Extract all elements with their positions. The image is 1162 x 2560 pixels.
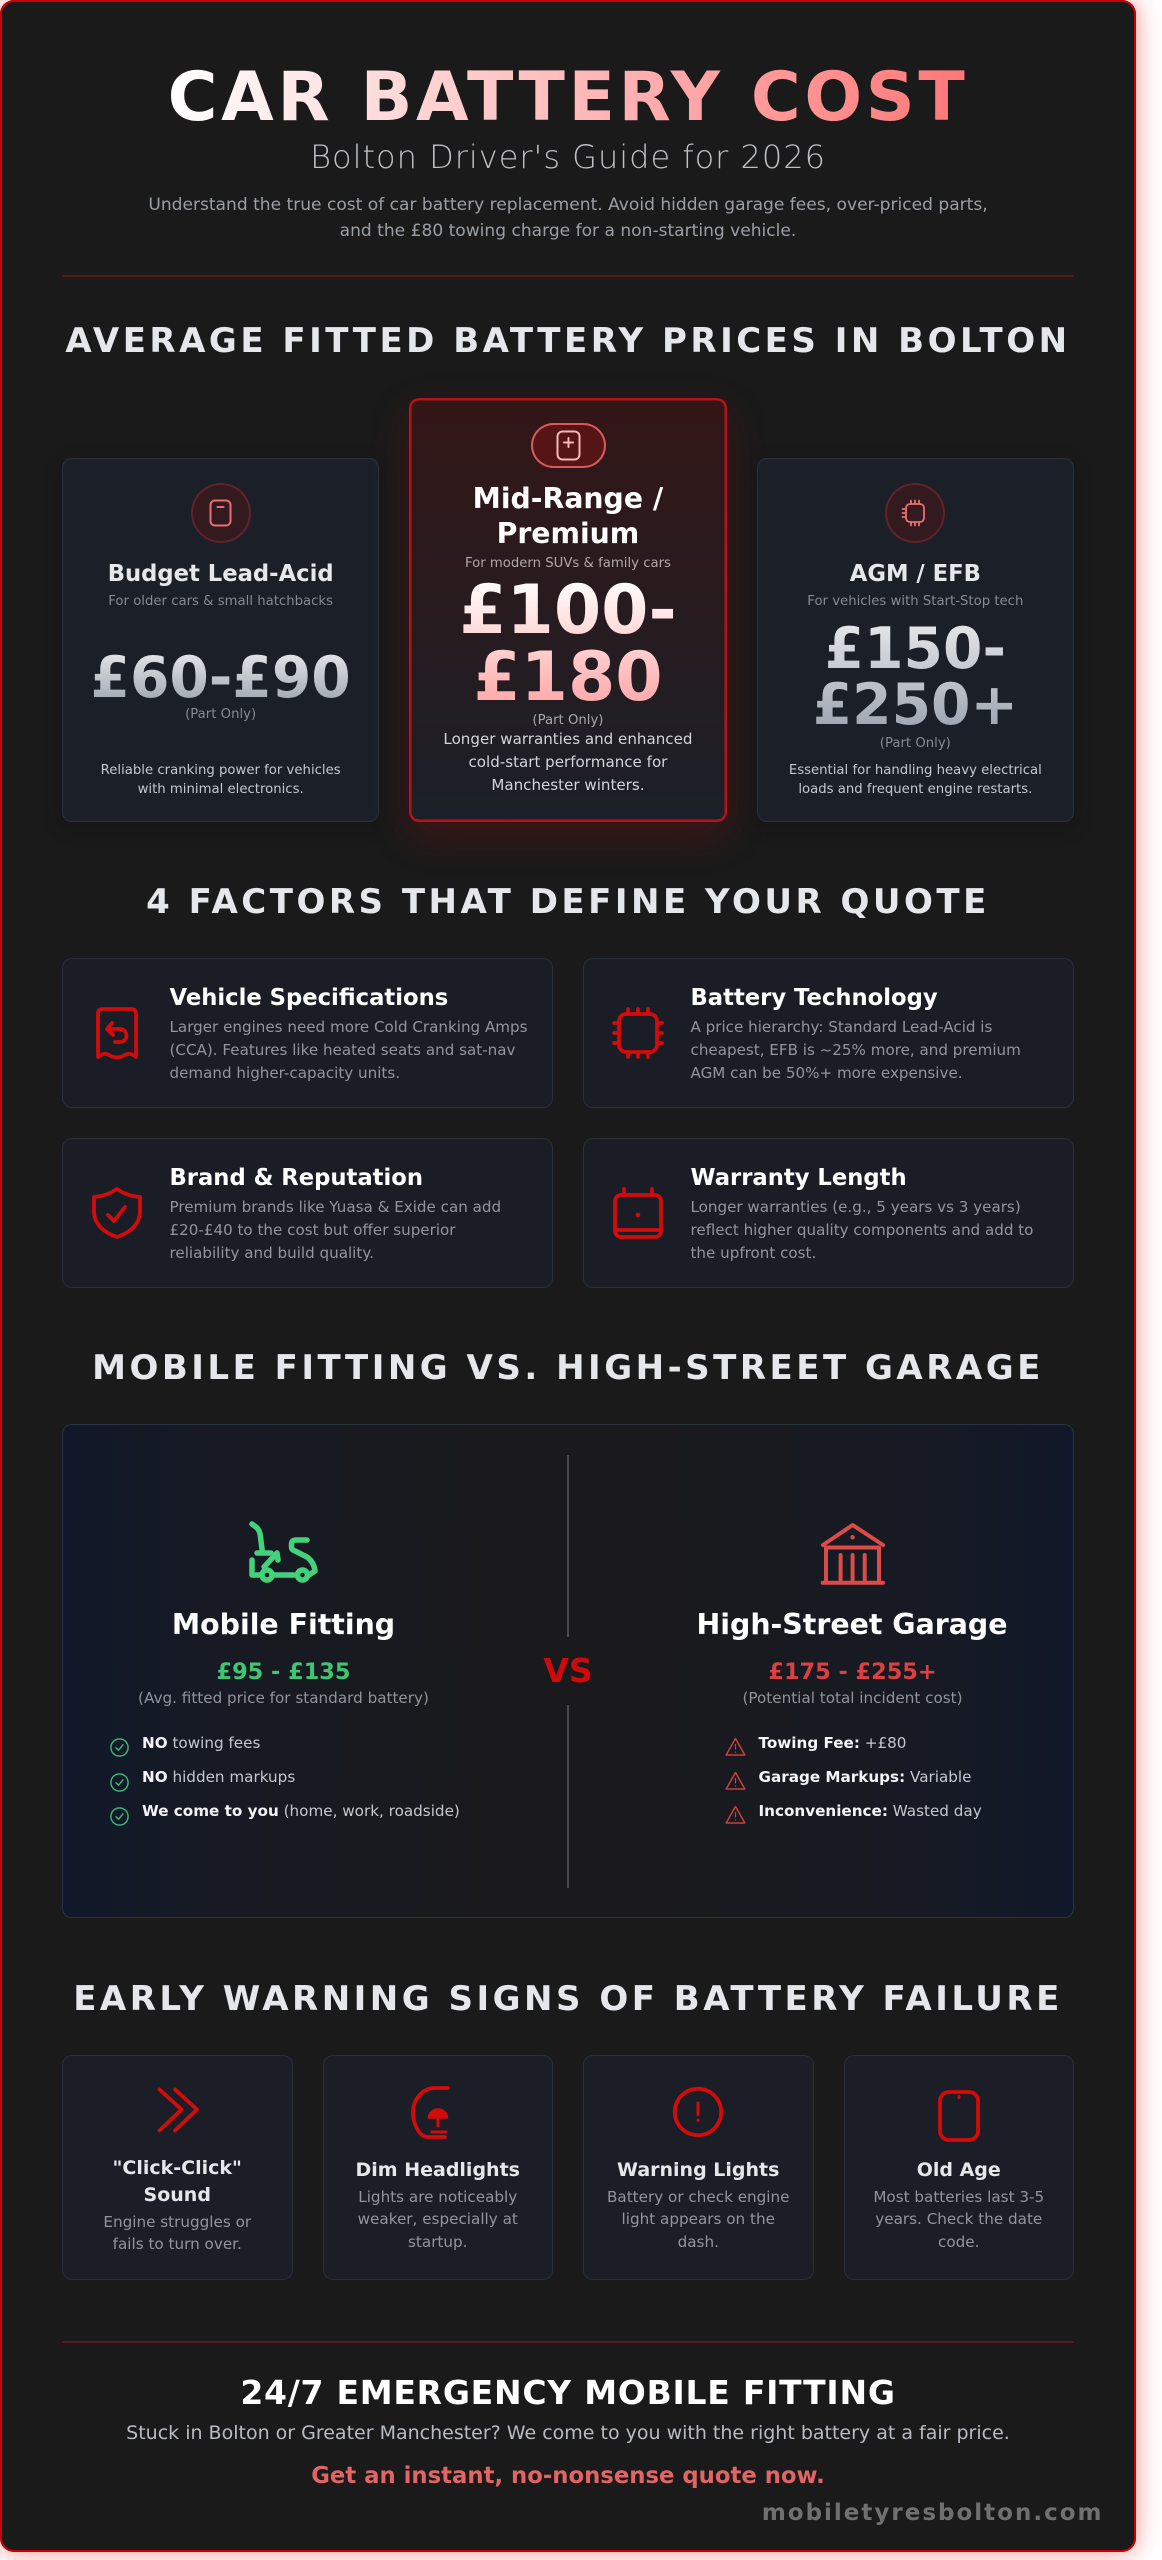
divider lower [567, 1705, 568, 1888]
sign text: code. [938, 2233, 979, 2251]
price: £60-£90 [91, 645, 351, 711]
footer heading: 24/7 EMERGENCY MOBILE FITTING [240, 2372, 896, 2412]
icon: mobile fitting vehicle [249, 1521, 318, 1583]
factor text: reliability and build quality. [170, 1244, 374, 1262]
price note: (Part Only) [880, 736, 951, 751]
card audience: For modern SUVs & family cars [465, 556, 671, 571]
subtitle: Bolton Driver's Guide for 2026 [310, 138, 826, 176]
garage title: High-Street Garage [696, 1608, 1008, 1640]
icon: battery minus [191, 483, 251, 543]
price note: (Part Only) [185, 707, 256, 722]
factor text [170, 1198, 501, 1262]
check icon [110, 1773, 129, 1792]
card description: Reliable cranking power for vehicles [101, 763, 341, 778]
benefit: NO towing fees [142, 1734, 260, 1752]
heading: warning signs: EARLY WARNING SIGNS OF BATTERY FAILURE [73, 1979, 1063, 2019]
price: £180 [473, 638, 663, 717]
icon: chip [885, 483, 945, 543]
icon: double chevron [158, 2088, 199, 2132]
drawback: Garage Markups: Variable [758, 1768, 972, 1786]
website: mobiletyresbolton.com [762, 2500, 1104, 2526]
icon: battery plus [531, 423, 606, 468]
drawback: Inconvenience: Wasted day [758, 1802, 982, 1820]
icon: garage building [820, 1523, 886, 1585]
price [757, 621, 1074, 733]
card description: Longer warranties and enhanced [443, 730, 692, 748]
sign text [358, 2188, 518, 2251]
sign text: fails to turn over. [113, 2235, 242, 2253]
sign text [607, 2188, 790, 2251]
card description [443, 730, 692, 794]
heading: factors: 4 FACTORS THAT DEFINE YOUR QUOTE [146, 882, 990, 922]
card description: loads and frequent engine restarts. [798, 782, 1032, 797]
factor title: Battery Technology [690, 985, 938, 1011]
mobile fitting caption: (Avg. fitted price for standard battery) [138, 1689, 429, 1707]
panel: click-click sound [62, 2055, 292, 2280]
sign title: "Click-Click" [113, 2156, 242, 2178]
check icon [110, 1807, 129, 1826]
drawback: Towing Fee: +£80 [758, 1734, 906, 1752]
card audience: For older cars & small hatchbacks [108, 594, 333, 609]
price [409, 576, 727, 711]
sign title: Warning Lights [617, 2159, 779, 2181]
divider upper [567, 1455, 568, 1637]
panel: dim headlights [322, 2055, 553, 2280]
factor text [170, 1018, 528, 1082]
card description [101, 763, 341, 797]
sign text [103, 2212, 252, 2253]
check icon [110, 1738, 129, 1757]
card title: Premium [497, 517, 639, 550]
icon: alert circle [672, 2086, 724, 2138]
sign text: Lights are noticeably [358, 2188, 517, 2206]
factor text: reflect higher quality components and add to [690, 1221, 1033, 1239]
panel: vehicle specifications [62, 958, 553, 1108]
sign text: Engine struggles or [103, 2212, 251, 2230]
card title: AGM / EFB [850, 561, 981, 587]
factor text: Longer warranties (e.g., 5 years vs 3 years) [690, 1198, 1021, 1216]
garage price: £175 - £255+ [768, 1659, 937, 1685]
panel: mid-range premium card [409, 398, 727, 822]
sign title: Old Age [917, 2159, 1001, 2181]
price: £150- [825, 616, 1006, 682]
warning icon [726, 1772, 746, 1790]
sign title [113, 2156, 242, 2206]
price note: (Part Only) [532, 713, 603, 728]
icon: headlight [411, 2086, 450, 2139]
factor text: cheapest, EFB is ~25% more, and premium [690, 1041, 1021, 1059]
factor text [690, 1198, 1033, 1262]
heading: comparison: MOBILE FITTING VS. HIGH-STREET GARAGE [92, 1348, 1044, 1388]
card title [473, 482, 664, 550]
price: £100- [459, 570, 677, 650]
sign text: startup. [408, 2233, 467, 2251]
drawbacks list [726, 1734, 982, 1824]
factor text: A price hierarchy: Standard Lead-Acid is [690, 1018, 992, 1036]
sign text: light appears on the [622, 2210, 775, 2228]
VS badge: VS [543, 1651, 593, 1690]
sign text: weaker, especially at [358, 2210, 518, 2228]
footer call to action: Get an instant, no-nonsense quote now. [311, 2463, 825, 2489]
card description: with minimal electronics. [138, 782, 304, 797]
factor title: Vehicle Specifications [170, 985, 448, 1011]
factor text: £20-£40 to the cost but offer superior [170, 1221, 456, 1239]
icon: chip [612, 1007, 664, 1059]
factor text: AGM can be 50%+ more expensive. [690, 1064, 963, 1082]
factor title: Warranty Length [690, 1165, 907, 1191]
icon: aged battery [938, 2090, 980, 2142]
title: CAR BATTERY COST [168, 58, 968, 137]
intro text: and the £80 towing charge for a non-starting vehicle. [340, 221, 796, 241]
card title: Mid-Range / [473, 482, 663, 515]
card description [789, 763, 1042, 797]
factor text: demand higher-capacity units. [170, 1064, 400, 1082]
sign title: Sound [144, 2184, 211, 2206]
intro text [148, 194, 988, 241]
panel: warning lights [583, 2055, 814, 2280]
benefit: We come to you (home, work, roadside) [142, 1802, 460, 1820]
factor text [690, 1018, 1021, 1082]
benefits list [110, 1734, 460, 1826]
warning icon [726, 1806, 746, 1824]
panel: battery technology [583, 958, 1074, 1108]
sign text: dash. [678, 2233, 719, 2251]
card description: cold-start performance for [468, 753, 667, 771]
sign text: Battery or check engine [607, 2188, 790, 2206]
panel: comparison [62, 1424, 1074, 1918]
sign text: years. Check the date [875, 2210, 1042, 2228]
mobile fitting price: £95 - £135 [217, 1659, 350, 1685]
factor title: Brand & Reputation [170, 1165, 423, 1191]
icon: shield check [92, 1187, 142, 1239]
garage caption: (Potential total incident cost) [742, 1689, 963, 1707]
card audience: For vehicles with Start-Stop tech [807, 594, 1023, 609]
mobile fitting title: Mobile Fitting [172, 1608, 395, 1640]
panel: AGM EFB card [757, 458, 1074, 822]
icon: receipt with return arrow [96, 1007, 138, 1060]
factor text: Premium brands like Yuasa & Exide can add [170, 1198, 501, 1216]
factor text: Larger engines need more Cold Cranking Amps [170, 1018, 528, 1036]
sign text [873, 2188, 1044, 2251]
panel: old age [844, 2055, 1074, 2280]
icon: calendar battery [613, 1187, 663, 1239]
panel: brand and reputation [62, 1138, 553, 1288]
warning icon [726, 1738, 746, 1756]
card description: Essential for handling heavy electrical [789, 763, 1042, 778]
footer text: Stuck in Bolton or Greater Manchester? We come to you with the right battery at a fair price. [126, 2422, 1010, 2444]
heading: prices: AVERAGE FITTED BATTERY PRICES IN BOLTON [65, 321, 1071, 361]
card title: Budget Lead-Acid [108, 561, 334, 587]
benefit: NO hidden markups [142, 1768, 295, 1786]
panel: budget lead-acid card [62, 458, 379, 822]
sign text: Most batteries last 3-5 [873, 2188, 1044, 2206]
panel: warranty length [583, 1138, 1074, 1288]
intro text: Understand the true cost of car battery replacement. Avoid hidden garage fees, over-priced parts, [148, 194, 988, 214]
factor text: (CCA). Features like heated seats and sat-nav [170, 1041, 515, 1059]
price: £250+ [813, 672, 1018, 738]
sign title: Dim Headlights [356, 2159, 520, 2181]
card description: Manchester winters. [491, 776, 645, 794]
factor text: the upfront cost. [690, 1244, 816, 1262]
